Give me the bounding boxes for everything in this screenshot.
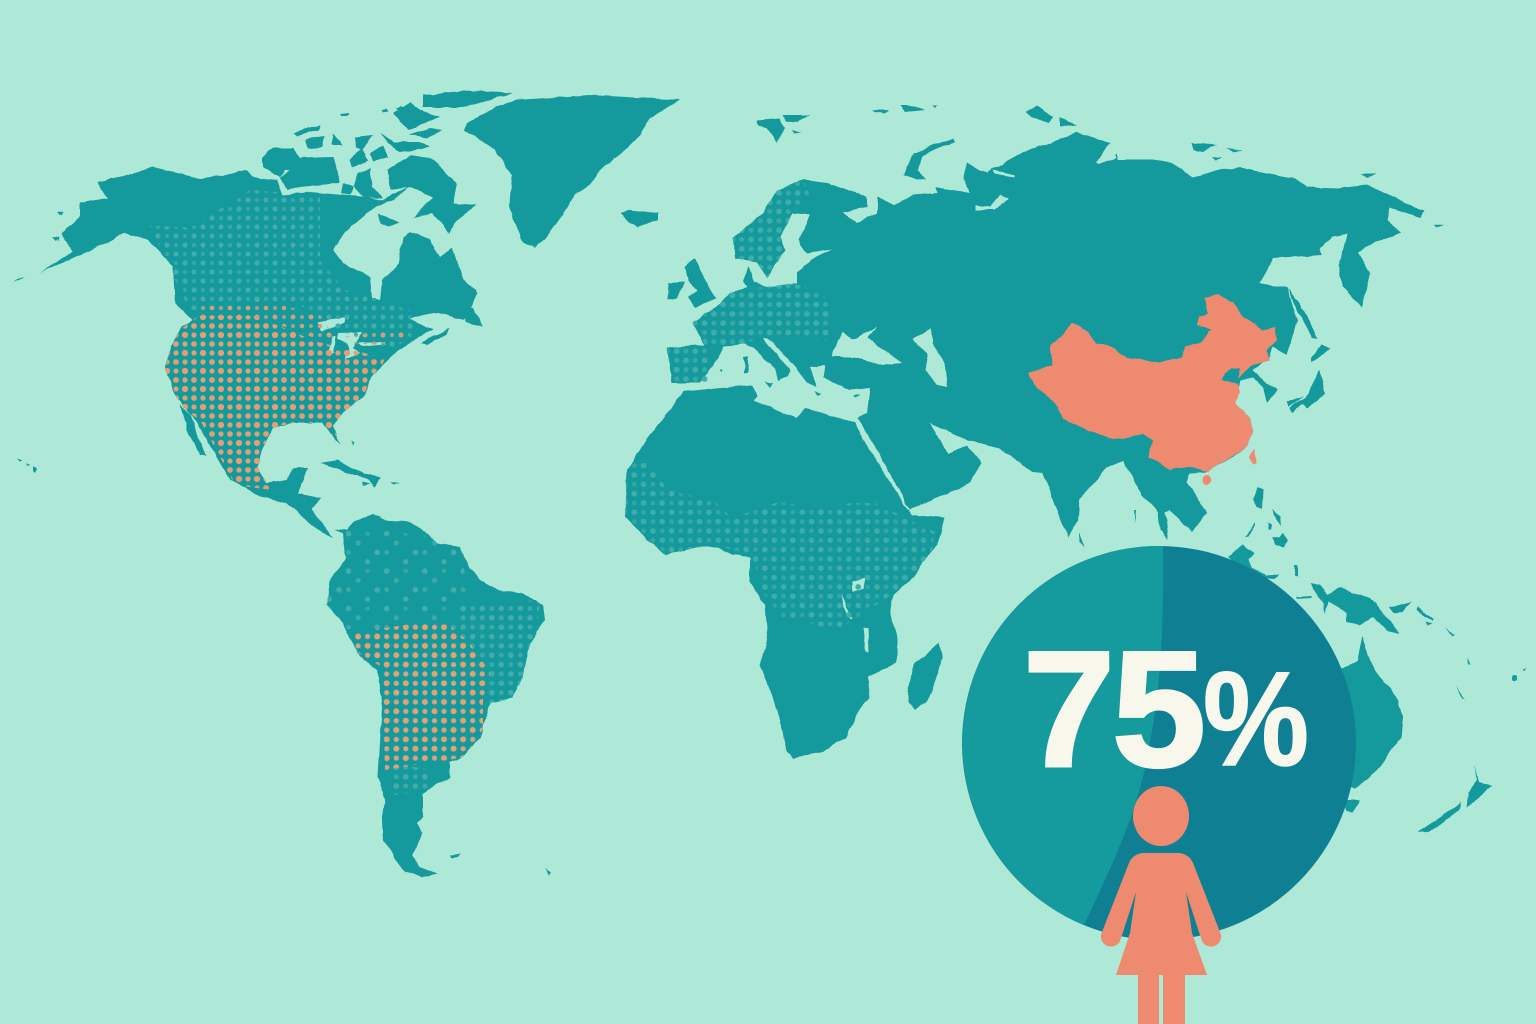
Gulf of Ob and Arctic inlets	[280, 155, 1116, 210]
Arctic Russian islands	[872, 105, 1444, 227]
Sakhalin and Japan	[1287, 288, 1330, 412]
New Guinea	[1310, 583, 1400, 633]
Tasmania	[1345, 800, 1360, 812]
Baja California	[180, 405, 206, 456]
dots: northern South America	[328, 531, 466, 636]
Novaya Zemlya	[903, 138, 955, 180]
Madagascar	[908, 642, 943, 710]
pie base slice	[962, 546, 1356, 940]
dots: border fade	[198, 300, 410, 345]
dots: central South America	[353, 623, 490, 770]
New Zealand	[1418, 765, 1493, 833]
Australia	[1300, 635, 1403, 788]
Taiwan	[1249, 448, 1256, 464]
Caribbean islands	[320, 440, 400, 487]
dots: Scandinavia	[733, 182, 810, 278]
dots: Africa	[625, 463, 935, 632]
dots: Canada	[150, 190, 415, 350]
dots: eastern and southern South America	[375, 600, 540, 795]
Falkland and South Atlantic islands	[450, 853, 551, 875]
Hainan	[1202, 474, 1212, 486]
Black Sea	[832, 327, 902, 365]
Philippines and Indonesia islands	[1079, 487, 1312, 599]
continent: Africa	[625, 385, 945, 758]
Great Lakes	[317, 317, 385, 360]
left leg	[1138, 974, 1159, 1024]
Hawaii and Aleutians	[14, 211, 103, 473]
body and dress	[1101, 853, 1221, 975]
dots: United States and Mexico	[160, 316, 385, 490]
Iceland	[620, 210, 658, 227]
icon: woman figure	[1101, 786, 1221, 1024]
pie light slice	[962, 546, 1163, 925]
percentage label: 5	[1112, 617, 1206, 801]
percentage label: %	[1203, 645, 1309, 794]
Greenland	[465, 95, 680, 248]
head	[1133, 786, 1189, 846]
continent: North America	[40, 167, 477, 537]
dots: Iberia	[667, 348, 708, 382]
African lakes	[842, 578, 869, 653]
continent: South America	[327, 514, 545, 878]
north Greenland	[423, 91, 513, 107]
China mainland	[1028, 294, 1277, 472]
world map	[14, 91, 1527, 878]
Svalbard	[757, 115, 810, 142]
pie chart: 75 percent	[962, 546, 1356, 940]
China highlight	[1028, 294, 1277, 486]
percentage label	[1023, 617, 1309, 801]
continent: Eurasia	[667, 132, 1425, 540]
British Isles	[667, 258, 717, 308]
right leg	[1163, 974, 1185, 1024]
percentage label: 7	[1023, 617, 1115, 801]
dots: western Europe	[692, 285, 828, 345]
Canadian Arctic islands	[57, 102, 483, 345]
Caspian Sea	[912, 328, 948, 387]
Pacific islands	[1388, 601, 1527, 699]
land masses	[14, 91, 1527, 878]
Mediterranean islands	[720, 357, 860, 398]
